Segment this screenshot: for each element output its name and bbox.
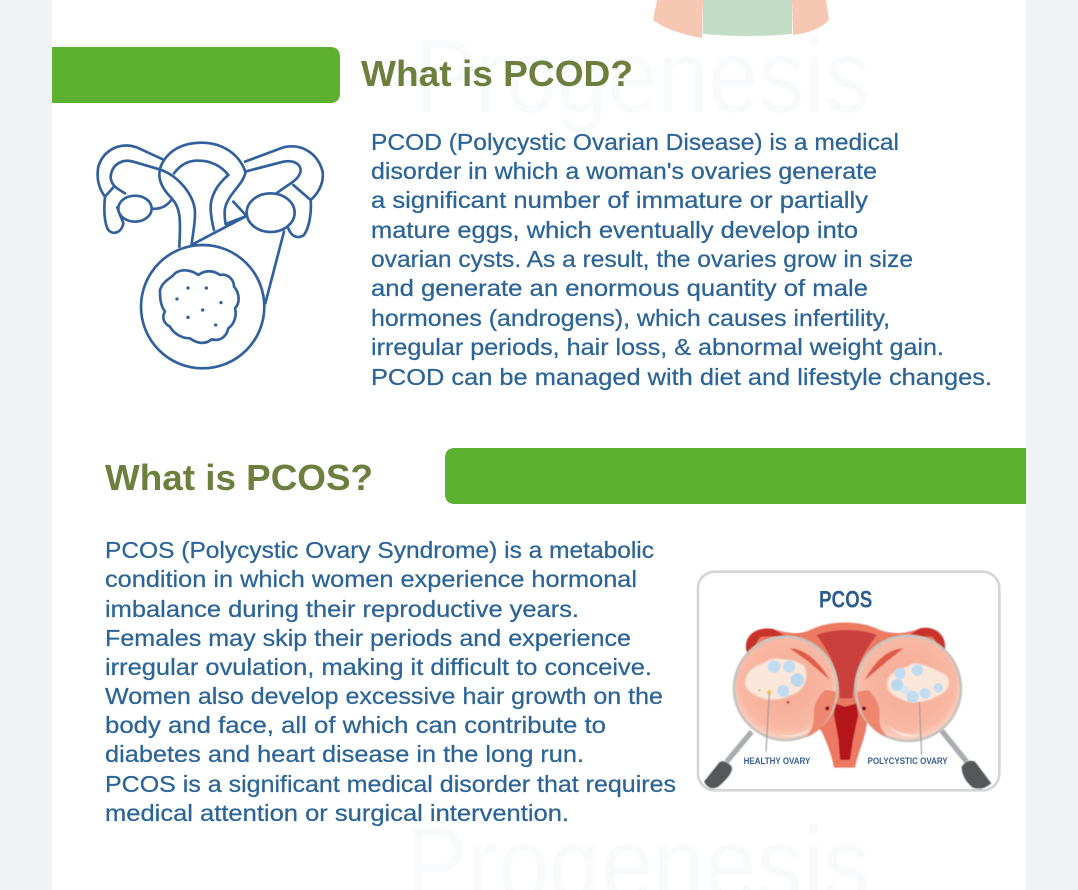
icon: uterus and ovary with cysts xyxy=(98,143,323,368)
text block: PCOD description xyxy=(371,129,992,390)
text block: PCOD description: PCOD can be managed with diet and lifestyle changes. xyxy=(371,364,992,390)
panel: PCOS illustration xyxy=(698,572,999,790)
heading: What is PCOD?: What is PCOD? xyxy=(361,53,633,94)
label: PCOS title: PCOS xyxy=(819,586,872,613)
text block: PCOS description: irregular ovulation, making it difficult to conceive. xyxy=(105,654,652,680)
text block: PCOD description: hormones (androgens), which causes infertility, xyxy=(371,305,890,331)
text block: PCOD description: ovarian cysts. As a result, the ovaries grow in size xyxy=(371,246,913,272)
text block: PCOS description: imbalance during their reproductive years. xyxy=(105,596,579,622)
text block: PCOS description: body and face, all of which can contribute to xyxy=(105,712,606,738)
banner: PCOS green bar xyxy=(445,448,1026,504)
text block: PCOD description: PCOD (Polycystic Ovarian Disease) is a medical xyxy=(371,129,899,155)
text block: PCOD description: a significant number of immature or partially xyxy=(371,187,869,213)
text block: PCOS description xyxy=(105,537,676,826)
icon: left magnifier with healthy ovary xyxy=(704,637,837,788)
text block: PCOS description: condition in which women experience hormonal xyxy=(105,566,637,592)
text block: PCOS description: medical attention or surgical intervention. xyxy=(105,800,569,826)
text block: PCOD description: disorder in which a woman's ovaries generate xyxy=(371,158,877,184)
text block: PCOD description: mature eggs, which eventually develop into xyxy=(371,217,858,243)
icon: right magnifier with polycystic ovary xyxy=(856,636,991,789)
text block: PCOS description: diabetes and heart disease in the long run. xyxy=(105,741,584,767)
banner: PCOD green bar xyxy=(52,47,340,103)
illustration: figure torso cropped at top xyxy=(653,0,829,38)
heading: What is PCOS?: What is PCOS? xyxy=(105,457,373,498)
label: healthy ovary: HEALTHY OVARY xyxy=(744,756,810,766)
text block: PCOD description: irregular periods, hair loss, & abnormal weight gain. xyxy=(371,334,944,360)
text block: PCOS description: Women also develop excessive hair growth on the xyxy=(105,683,663,709)
text block: PCOD description: and generate an enormous quantity of male xyxy=(371,275,868,301)
text: Progenesis xyxy=(415,19,870,135)
text block: PCOS description: PCOS is a significant medical disorder that requires xyxy=(105,771,676,797)
label: polycystic ovary: POLYCYSTIC OVARY xyxy=(868,756,948,766)
text block: PCOS description: Females may skip their periods and experience xyxy=(105,625,631,651)
illustration: uterus xyxy=(746,622,945,768)
text block: PCOS description: PCOS (Polycystic Ovary Syndrome) is a metabolic xyxy=(105,537,654,563)
